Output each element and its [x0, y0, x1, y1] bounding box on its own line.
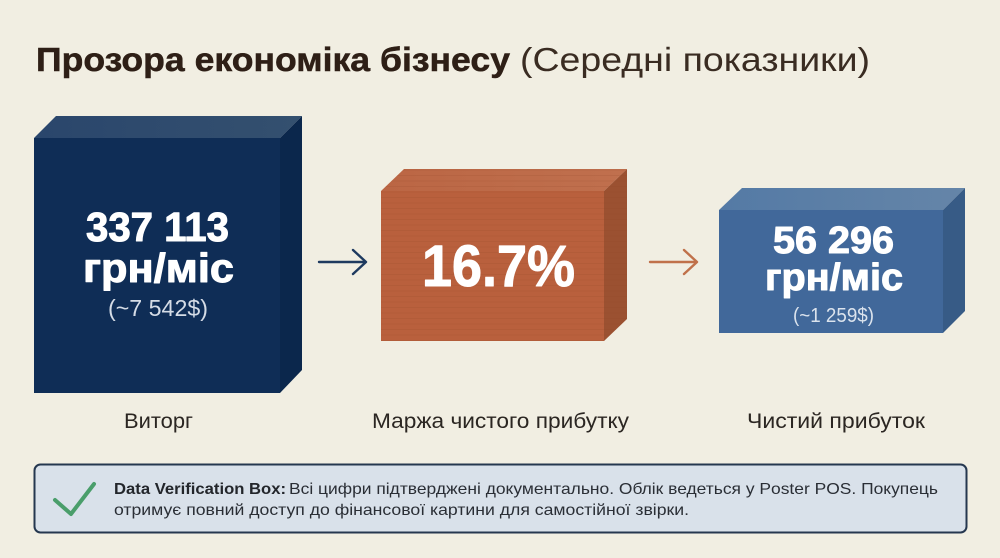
- profit amount: 56 296: [773, 220, 894, 262]
- label: net profit: Чистий прибуток: [747, 410, 926, 433]
- revenue unit: грн/міс: [83, 245, 234, 291]
- icon: check mark: [55, 484, 94, 514]
- verification text: отримує повний доступ до фінансової картини для самостійної звірки.: [114, 502, 689, 519]
- title: [36, 41, 870, 78]
- verification text: Data Verification Box:: [114, 481, 286, 498]
- block: margin: [381, 169, 627, 341]
- label: margin: Маржа чистого прибутку: [372, 410, 630, 433]
- arrow: revenue to margin: [319, 250, 366, 274]
- label: revenue: Виторг: [124, 410, 193, 433]
- callout: data verification box: [34, 464, 966, 532]
- title: Прозора економіка бізнесу: [36, 41, 511, 78]
- margin value: 16.7%: [422, 234, 575, 299]
- block: revenue: [34, 116, 302, 393]
- revenue amount: 337 113: [86, 204, 229, 250]
- profit unit: грн/міс: [765, 257, 903, 299]
- title: (Середні показники): [520, 41, 870, 78]
- profit in dollars: (~1 259$): [793, 305, 874, 327]
- arrow: margin to profit: [650, 250, 697, 274]
- verification text: Всі цифри підтверджені документально. Облік ведеться у Poster POS. Покупець: [289, 481, 938, 498]
- block: net profit: [719, 188, 965, 333]
- verification text: [114, 481, 938, 519]
- revenue in dollars: (~7 542$): [108, 295, 208, 321]
